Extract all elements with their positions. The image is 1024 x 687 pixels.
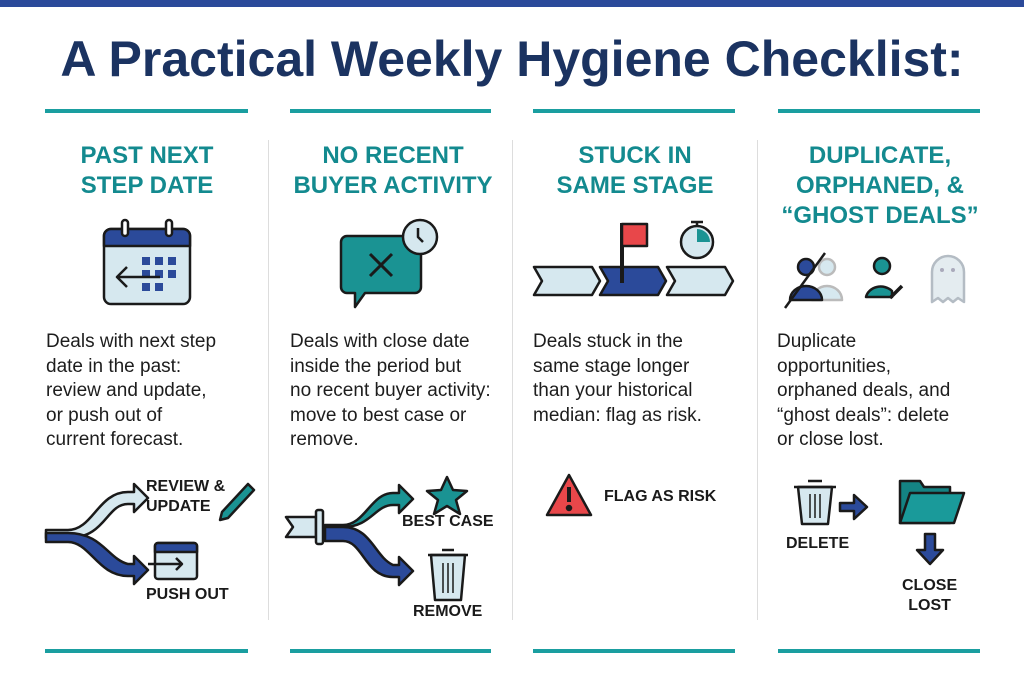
heading: no recent buyer activity: BUYER ACTIVITY [293, 172, 493, 199]
text: col2: no recent buyer activity: [290, 380, 491, 401]
icon: small calendar [148, 543, 197, 579]
title: A Practical Weekly Hygiene Checklist: [60, 31, 964, 87]
heading: no recent buyer activity [293, 142, 493, 199]
label: remove: REMOVE [413, 603, 482, 620]
label: review & update: REVIEW & [146, 478, 225, 495]
label: close lost [902, 577, 957, 614]
diagram: delete to close lost [794, 480, 966, 566]
label: close lost: CLOSE [902, 577, 957, 594]
icon: people and ghost [785, 253, 964, 308]
text: col4: orphaned deals, and [777, 380, 950, 401]
label: push out: PUSH OUT [146, 586, 229, 603]
icon: calendar [104, 220, 190, 304]
icon: pencil [220, 484, 254, 520]
text: col4: Duplicate [777, 331, 856, 352]
heading: stuck in same stage: SAME STAGE [557, 172, 713, 199]
text: col4 [777, 331, 950, 450]
text: col2 [290, 331, 491, 450]
heading: stuck in same stage: STUCK IN [578, 142, 692, 169]
text: col3 [533, 331, 702, 426]
text: col1 [46, 331, 216, 450]
text: col1: date in the past: [46, 356, 181, 376]
text: col1: or push out of [46, 404, 162, 426]
label: review & update: UPDATE [146, 498, 211, 515]
label: best case: BEST CASE [402, 513, 494, 530]
icon: chat with clock [341, 220, 437, 307]
text: col3: Deals stuck in the [533, 331, 683, 352]
text: col3: median: flag as risk. [533, 404, 702, 426]
text: col3: than your historical [533, 380, 692, 401]
text: col2: inside the period but [290, 356, 461, 376]
text: col2: remove. [290, 429, 359, 450]
text: col4: or close lost. [777, 429, 884, 450]
label: flag as risk: FLAG AS RISK [604, 488, 716, 505]
label: close lost: LOST [908, 597, 951, 614]
text: col1: Deals with next step [46, 331, 216, 352]
diagram: best case / remove [284, 476, 468, 602]
diagram: review/push out paths [46, 484, 148, 584]
text: col3: same stage longer [533, 356, 689, 376]
text: col4: “ghost deals”: delete [777, 404, 949, 426]
heading: past next step date: STEP DATE [81, 172, 213, 199]
text: col1: review and update, [46, 380, 207, 401]
text: col2: move to best case or [290, 404, 466, 426]
heading: past next step date: PAST NEXT [81, 142, 213, 169]
heading: duplicate ghost deals: “GHOST DEALS” [781, 202, 979, 229]
heading: duplicate ghost deals: ORPHANED, & [796, 172, 964, 199]
heading: stuck in same stage [557, 142, 713, 199]
text: col4: opportunities, [777, 356, 891, 376]
heading: duplicate ghost deals: DUPLICATE, [809, 142, 951, 169]
icon: stage chevrons with flag and stopwatch [534, 222, 733, 295]
heading: past next step date [81, 142, 214, 199]
heading: no recent buyer activity: NO RECENT [322, 142, 464, 169]
icon: warning triangle [546, 474, 592, 516]
heading: duplicate ghost deals [781, 142, 979, 229]
label: delete: DELETE [786, 535, 849, 552]
text: col1: current forecast. [46, 429, 183, 450]
label: review & update [146, 478, 225, 515]
text: col2: Deals with close date [290, 331, 470, 352]
